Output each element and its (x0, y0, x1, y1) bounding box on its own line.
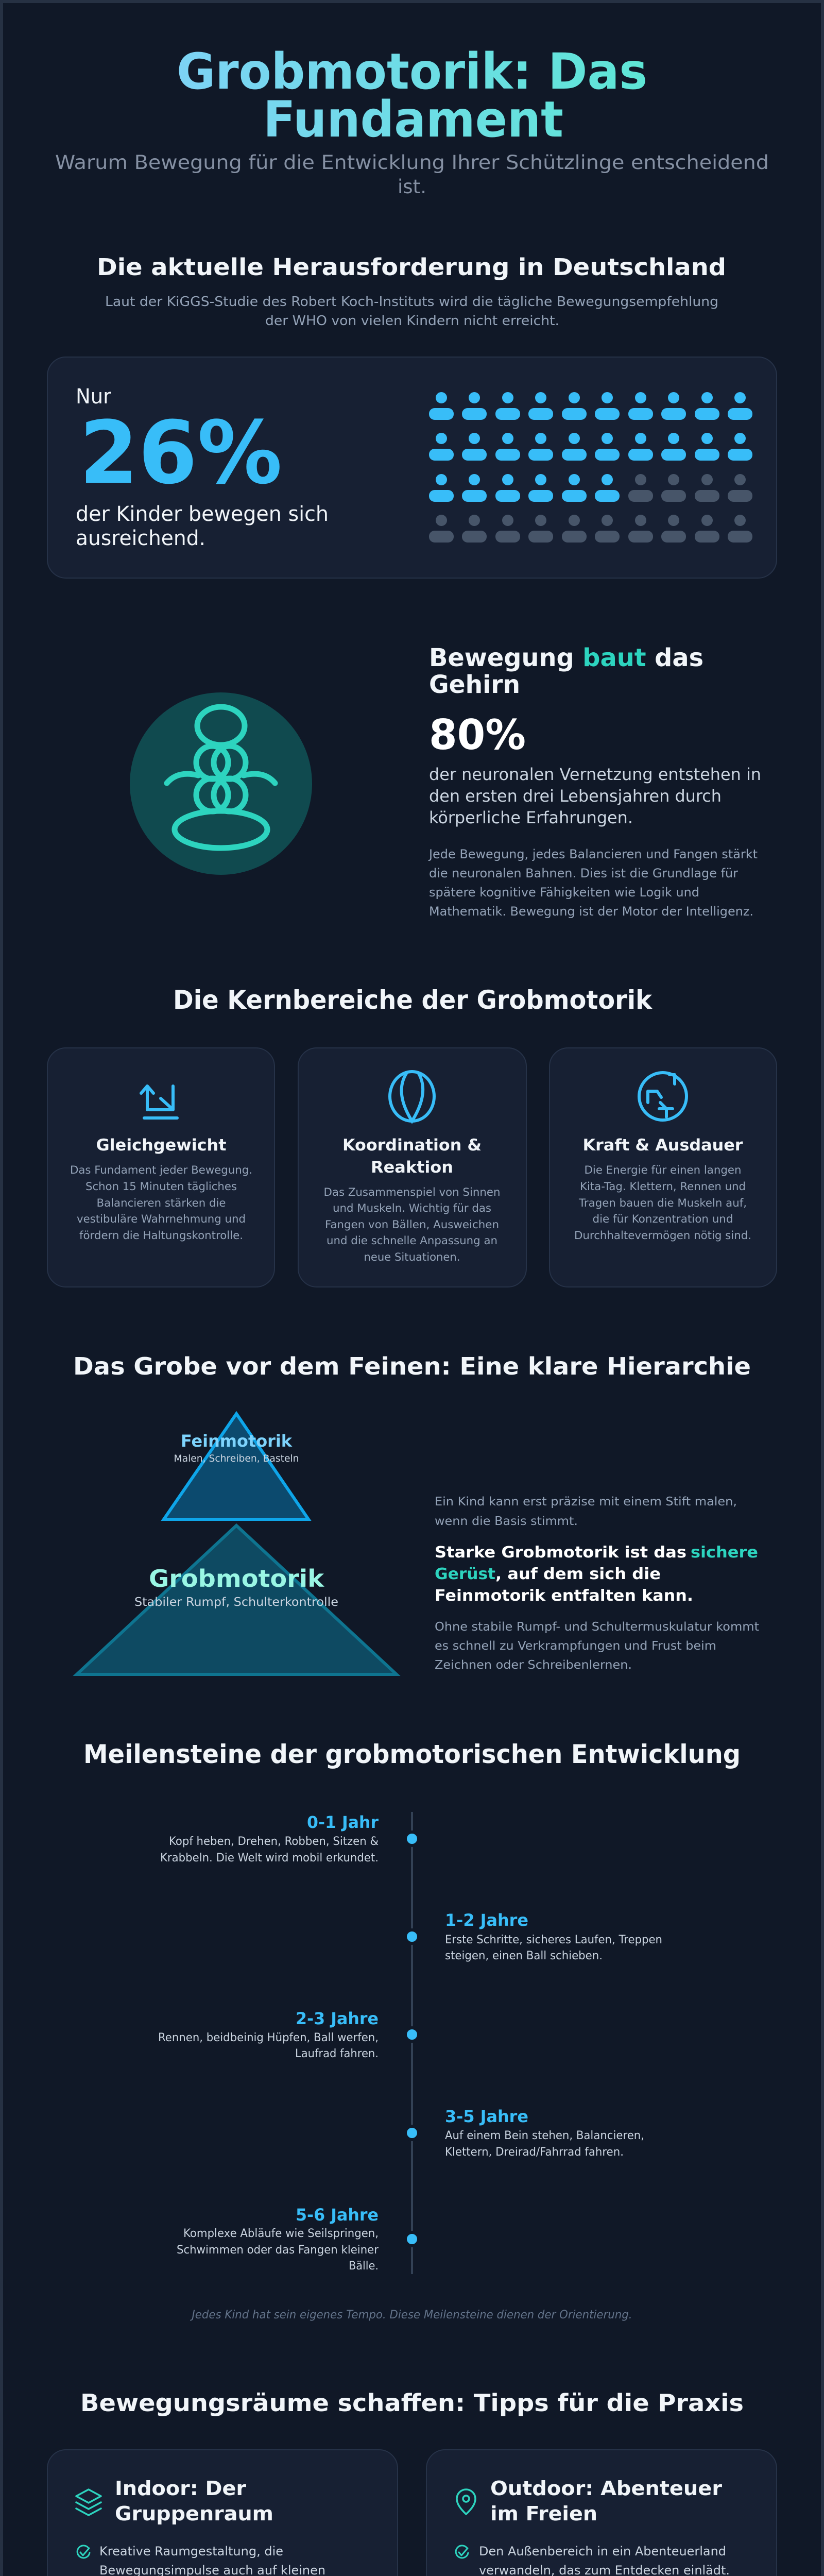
list: indoor tips: Kreative Raumgestaltung, die (99, 2544, 283, 2558)
milestone 3-5: Auf einem Bein stehen, Balancieren, (445, 2129, 644, 2142)
icon: brain/body circle (130, 692, 312, 875)
card text: Koordination: Das Zusammenspiel von Sinnen (323, 1186, 501, 1198)
text block: Bewegung baut das Gehirn: Bewegung baut das (429, 643, 703, 672)
milestone 0-1: 0-1 Jahr (307, 1812, 379, 1832)
subtitle: ist. (398, 176, 426, 198)
card text: Gleichgewicht: Gleichgewicht (96, 1136, 227, 1155)
text block: hierarchy explanation: wenn die Basis stimmt. (435, 1515, 578, 1528)
milestone 0-1: Kopf heben, Drehen, Robben, Sitzen & (169, 1835, 379, 1848)
title: Grobmotorik: Das (177, 43, 647, 100)
card text: Kraft: Kita-Tag. Klettern, Rennen und (580, 1180, 746, 1193)
milestone 5-6: Schwimmen oder das Fangen kleiner (177, 2244, 379, 2257)
card title: Outdoor: Outdoor: Abenteuer (490, 2477, 722, 2500)
card text: Gleichgewicht (70, 1136, 252, 1242)
intro text: KiGGS: der WHO von vielen Kindern nicht erreicht. (265, 313, 559, 329)
text block: Bewegung baut das Gehirn: spätere kognitive Fähigkeiten wie Logik und (429, 885, 699, 900)
card text: Koordination: und Muskeln. Wichtig für das (333, 1202, 491, 1214)
heading: Kernbereiche: Die Kernbereiche der Grobmotorik (173, 985, 653, 1015)
milestone 5-6 (177, 2205, 379, 2273)
text block: hierarchy explanation: , auf dem sich die (495, 1565, 661, 1583)
milestone 0-1 (160, 1812, 379, 1865)
note: tempo: Jedes Kind hat sein eigenes Tempo. Diese Meilensteine dienen der Orientierung. (190, 2309, 632, 2321)
milestone 1-2: Erste Schritte, sicheres Laufen, Treppen (445, 1934, 662, 1946)
card title: Indoor: Gruppenraum (115, 2502, 273, 2525)
text block: hierarchy explanation: sichere (691, 1544, 758, 1562)
subtitle (55, 151, 769, 198)
pyramid top: Feinmotorik: Feinmotorik (181, 1431, 293, 1451)
card text: Gleichgewicht: fördern die Haltungskontrolle. (79, 1229, 243, 1242)
card text: Koordination: Fangen von Bällen, Ausweichen (325, 1218, 499, 1231)
title: Fundament (263, 91, 563, 148)
text block: hierarchy explanation: Ohne stabile Rumpf- und Schultermuskulatur kommt (435, 1620, 759, 1634)
stat text (76, 385, 329, 550)
text block: Bewegung baut das Gehirn: Gehirn (429, 670, 520, 699)
heading: Herausforderung: Die aktuelle Herausforderung in Deutschland (97, 253, 726, 281)
card title: Indoor: Indoor: Der (115, 2477, 246, 2500)
text block: hierarchy explanation: Gerüst (435, 1565, 495, 1583)
card text: Gleichgewicht: Balancieren stärken die (97, 1197, 226, 1209)
card text: Koordination (323, 1136, 501, 1263)
text block: hierarchy explanation: Zeichnen oder Schreibenlernen. (435, 1658, 632, 1672)
pyramid base: Grobmotorik (77, 1526, 397, 1674)
stat text: ausreichend. (76, 527, 205, 550)
card title: Outdoor: im Freien (490, 2502, 597, 2525)
pyramid base: Grobmotorik: Grobmotorik (149, 1565, 324, 1592)
panel: Gleichgewicht (47, 1048, 274, 1287)
milestone 2-3: 2-3 Jahre (296, 2009, 379, 2028)
text block: Bewegung baut das Gehirn (428, 643, 761, 919)
card text: Kraft (574, 1136, 751, 1242)
text block: hierarchy explanation (435, 1495, 759, 1672)
panel: Outdoor (426, 2450, 777, 2576)
card text: Kraft: Tragen bauen die Muskeln auf, (578, 1197, 747, 1209)
card text: Kraft: Durchhaltevermögen nötig sind. (574, 1229, 751, 1242)
heading: Meilensteine: Meilensteine der grobmotorischen Entwicklung (83, 1739, 741, 1769)
timeline: milestones (158, 1812, 662, 2274)
text block: hierarchy explanation: Starke Grobmotorik ist das (435, 1544, 686, 1562)
card text: Kraft: Kraft & Ausdauer (583, 1136, 743, 1155)
text block: Bewegung baut das Gehirn: die neuronalen Bahnen. Dies ist die Grundlage für (429, 866, 738, 880)
text block: hierarchy explanation: Ein Kind kann erst präzise mit einem Stift malen, (435, 1495, 737, 1509)
text block: Bewegung baut das Gehirn: 80% (429, 711, 526, 759)
text block: hierarchy explanation: Feinmotorik entfalten kann. (435, 1587, 693, 1605)
icon: ball (390, 1072, 434, 1121)
milestone 3-5: Klettern, Dreirad/Fahrrad fahren. (445, 2146, 624, 2159)
list: outdoor tips (456, 2544, 737, 2576)
milestone 0-1: Krabbeln. Die Welt wird mobil erkundet. (160, 1852, 379, 1865)
pyramid top: Feinmotorik (164, 1414, 308, 1519)
milestone 2-3 (158, 2009, 379, 2060)
icon: map pin (457, 2489, 475, 2514)
card text: Gleichgewicht: Schon 15 Minuten tägliches (85, 1180, 237, 1193)
pictogram: 26 of 40 children (429, 392, 752, 543)
stat text: Nur (76, 385, 112, 409)
title (177, 43, 647, 148)
card title: Outdoor (490, 2477, 722, 2525)
stat text: der Kinder bewegen sich (76, 502, 329, 526)
text block: Bewegung baut das Gehirn: Jede Bewegung, jedes Balancieren und Fangen stärkt (428, 847, 758, 861)
intro text: KiGGS: Laut der KiGGS-Studie des Robert Koch-Instituts wird die tägliche Bewegungsempfehlung (105, 294, 718, 310)
milestone 2-3: Laufrad fahren. (295, 2047, 379, 2060)
list: outdoor tips: Den Außenbereich in ein Abenteuerland (479, 2544, 726, 2558)
text block: Bewegung baut das Gehirn: körperliche Erfahrungen. (429, 808, 633, 827)
list: indoor tips (77, 2544, 368, 2576)
text block: Bewegung baut das Gehirn: den ersten drei Lebensjahren durch (429, 786, 722, 806)
heading: Tipps: Bewegungsräume schaffen: Tipps für die Praxis (80, 2389, 744, 2417)
icon: layers (76, 2489, 101, 2515)
intro text: KiGGS (105, 294, 718, 329)
milestone 5-6: Komplexe Abläufe wie Seilspringen, (183, 2227, 379, 2240)
text block: Bewegung baut das Gehirn: Mathematik. Bewegung ist der Motor der Intelligenz. (429, 904, 753, 919)
card title: Indoor (115, 2477, 273, 2525)
stat text: 26% (79, 402, 282, 503)
milestone 3-5: 3-5 Jahre (445, 2107, 528, 2126)
card text: Koordination: Koordination & (342, 1136, 482, 1155)
text block: hierarchy explanation: es schnell zu Verkrampfungen und Frust beim (435, 1639, 716, 1653)
milestone 1-2: 1-2 Jahre (445, 1910, 528, 1930)
chart: pyramid hierarchy (77, 1414, 397, 1674)
milestone 3-5 (445, 2107, 644, 2159)
pyramid base: Grobmotorik: Stabiler Rumpf, Schulterkontrolle (134, 1596, 338, 1609)
icon: balance arrows (141, 1086, 177, 1118)
milestone 5-6: Bälle. (349, 2260, 379, 2273)
heading: Hierarchie: Das Grobe vor dem Feinen: Eine klare Hierarchie (73, 1352, 751, 1380)
text block: Bewegung baut das Gehirn: der neuronalen Vernetzung entstehen in (429, 765, 761, 784)
icon: globe/strength (639, 1073, 686, 1120)
card text: Gleichgewicht: Das Fundament jeder Bewegung. (70, 1164, 252, 1176)
panel: 26% statistic (47, 357, 777, 578)
pyramid top: Feinmotorik: Malen, Schreiben, Basteln (174, 1453, 299, 1464)
card text: Koordination: Reaktion (371, 1158, 453, 1177)
subtitle: Warum Bewegung für die Entwicklung Ihrer Schützlinge entscheidend (55, 151, 769, 174)
card text: Gleichgewicht: vestibuläre Wahrnehmung und (77, 1213, 246, 1225)
milestone 5-6: 5-6 Jahre (296, 2205, 379, 2225)
milestone 1-2: steigen, einen Ball schieben. (445, 1950, 603, 1962)
milestone 2-3: Rennen, beidbeinig Hüpfen, Ball werfen, (158, 2031, 379, 2044)
card text: Kraft: die für Konzentration und (592, 1213, 733, 1225)
card text: Kraft: Die Energie für einen langen (584, 1164, 742, 1176)
card text: Koordination: und die schnelle Anpassung an (327, 1234, 497, 1247)
panel: Koordination (298, 1048, 526, 1287)
card text: Koordination: neue Situationen. (364, 1251, 460, 1263)
milestone 1-2 (445, 1910, 662, 1962)
panel: Indoor (47, 2450, 398, 2576)
panel: Kraft & Ausdauer (550, 1048, 777, 1287)
